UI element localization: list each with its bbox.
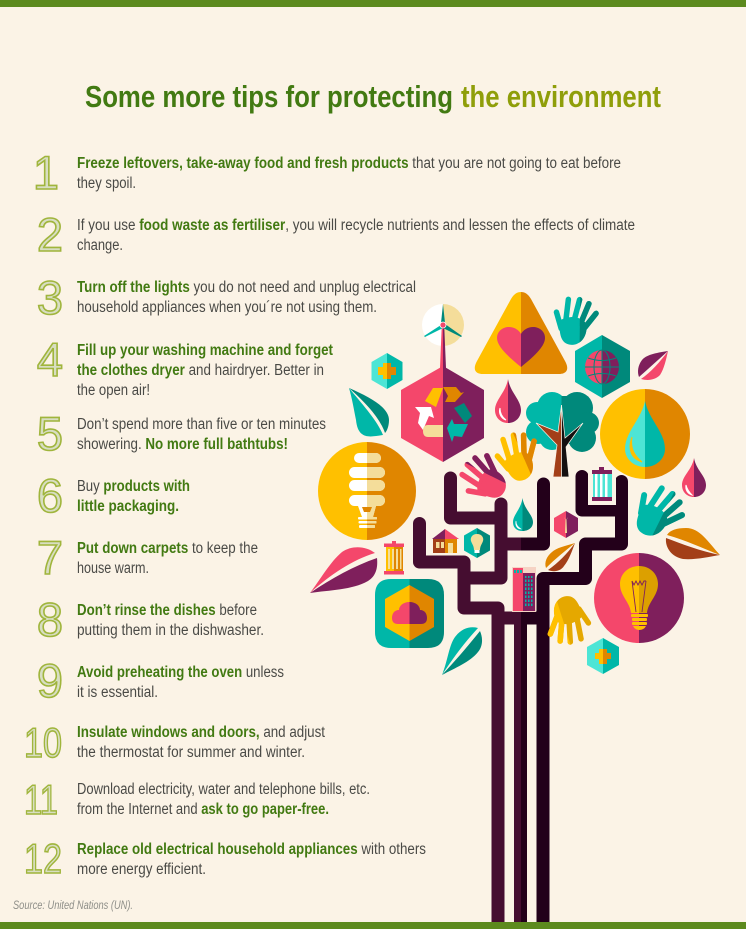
source note: Source: United Nations (UN). (13, 898, 133, 912)
tip 10 (24, 719, 326, 766)
tip 8: Don’t rinse the dishes before (77, 602, 257, 619)
tip 2: 2 (37, 208, 63, 261)
icon: wind turbine (422, 304, 464, 368)
tip 3: 3 (37, 271, 63, 324)
icon: small teal drop (513, 498, 533, 531)
tip 4 (37, 333, 333, 399)
tip 9: Avoid preheating the oven unless (77, 664, 284, 681)
tip 4: 4 (37, 333, 63, 386)
tip 9: 9 (37, 654, 63, 707)
tip 12: 12 (24, 835, 62, 882)
icon: teal leaf upper left (349, 388, 389, 436)
tip 8 (37, 593, 264, 646)
icon: yellow hand (547, 594, 590, 644)
icon: brown leaf (545, 543, 575, 571)
tip 8: 8 (37, 593, 63, 646)
tip 2 (37, 208, 635, 261)
icon: triangle with heart (475, 292, 567, 374)
icon: small drop right (682, 458, 706, 497)
tip 1 (33, 146, 621, 199)
tip 10: 10 (24, 719, 62, 766)
icon: small tree (526, 392, 599, 477)
icon: teal hand right (636, 485, 685, 536)
icon: building (512, 567, 536, 612)
tip 11: 11 (24, 776, 58, 823)
tip 7: Put down carpets to keep the (77, 540, 258, 557)
icon: plus hexagon bottom (587, 638, 619, 674)
tip 10: Insulate windows and doors, and adjust (77, 724, 326, 741)
icon: teal hand top (554, 296, 599, 345)
tip 4: the open air! (77, 382, 150, 399)
icon: pink hand (459, 453, 506, 498)
title: the environment (461, 79, 661, 114)
tip 4: Fill up your washing machine and forget (77, 342, 333, 359)
tip 11 (24, 776, 370, 823)
tip 2: If you use food waste as fertiliser, you will recycle nutrients and lessen the effects of climate (77, 217, 635, 234)
tip 1: Freeze leftovers, take-away food and fresh products that you are not going to eat before (77, 155, 621, 172)
tip 6: Buy products with (77, 478, 190, 495)
icon: pink leaf left (310, 547, 377, 593)
icon: plus hexagon top (372, 353, 402, 389)
icon: orange leaf right (666, 528, 720, 559)
icon: recycling hexagon (401, 366, 484, 462)
tip 10: the thermostat for summer and winter. (77, 744, 305, 761)
icon: cloud panel (375, 579, 444, 648)
icon: purple leaf (638, 351, 668, 380)
icon: lit bulb circle (594, 553, 684, 643)
tip 6: little packaging. (77, 498, 179, 515)
tip 3: household appliances when you´re not using them. (77, 299, 377, 316)
icon: water drop circle (600, 389, 690, 479)
icon: trash bin teal (588, 467, 616, 505)
icon: pink water drop (495, 379, 521, 423)
tip 2: change. (77, 237, 123, 254)
tree trunk and branches (420, 476, 622, 922)
icon: orange hand (494, 432, 537, 481)
tip 3: Turn off the lights you do not need and unplug electrical (77, 279, 416, 296)
tip 6 (37, 469, 190, 522)
tip 1: 1 (33, 146, 59, 199)
icon: small pink hexagon (554, 511, 578, 538)
icon: globe hexagon (575, 335, 630, 398)
tip 5: showering. No more full bathtubs! (77, 436, 288, 453)
tip 1: they spoil. (77, 175, 136, 192)
tip 5: 5 (37, 407, 63, 460)
tip 9: it is essential. (77, 684, 158, 701)
tip 5: Don’t spend more than five or ten minutes (77, 416, 326, 433)
tip 9 (37, 654, 284, 707)
tip 7: 7 (37, 531, 63, 584)
tip 5 (37, 407, 326, 460)
tip 4: the clothes dryer and hairdryer. Better in (77, 362, 324, 379)
tip 12 (24, 835, 426, 882)
icon: trash bin yellow (384, 541, 404, 574)
tip 3 (37, 271, 416, 324)
icon: small bulb hexagon (464, 528, 490, 558)
tip 12: more energy efficient. (77, 861, 206, 878)
title: Some more tips for protecting (85, 79, 453, 114)
tip 11: from the Internet and ask to go paper-free. (77, 801, 329, 818)
tip 11: Download electricity, water and telephone bills, etc. (77, 781, 370, 798)
icon: house (432, 529, 459, 553)
tip 7 (37, 531, 258, 584)
icon: teal leaf lower (442, 627, 482, 675)
tip 8: putting them in the dishwasher. (77, 622, 264, 639)
tip 7: house warm. (77, 560, 149, 577)
tip 12: Replace old electrical household appliances with others (77, 841, 426, 858)
tip 6: 6 (37, 469, 63, 522)
icon: light bulb circle (318, 442, 416, 540)
